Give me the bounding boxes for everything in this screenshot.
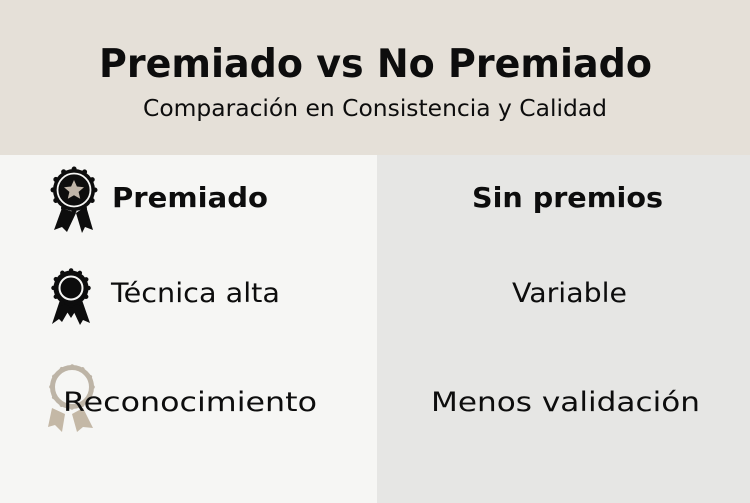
panel: header <box>0 0 750 155</box>
text: reconocimiento: Reconocimiento <box>63 387 317 418</box>
icon: black award badge with star <box>53 169 95 233</box>
panel: sin premios <box>377 155 750 503</box>
icon: black award badge <box>52 270 90 325</box>
text: tecnica alta: Técnica alta <box>110 278 280 309</box>
heading: premiado: Premiado <box>112 181 268 214</box>
icon: tan award badge <box>48 366 93 432</box>
heading: sin premios: Sin premios <box>472 181 663 214</box>
text: menos validacion: Menos validación <box>431 387 700 418</box>
text: variable: Variable <box>512 278 627 309</box>
subtitle: Comparación en Consistencia y Calidad <box>143 96 607 122</box>
title: Premiado vs No Premiado <box>99 42 652 87</box>
panel: premiado <box>0 155 377 503</box>
